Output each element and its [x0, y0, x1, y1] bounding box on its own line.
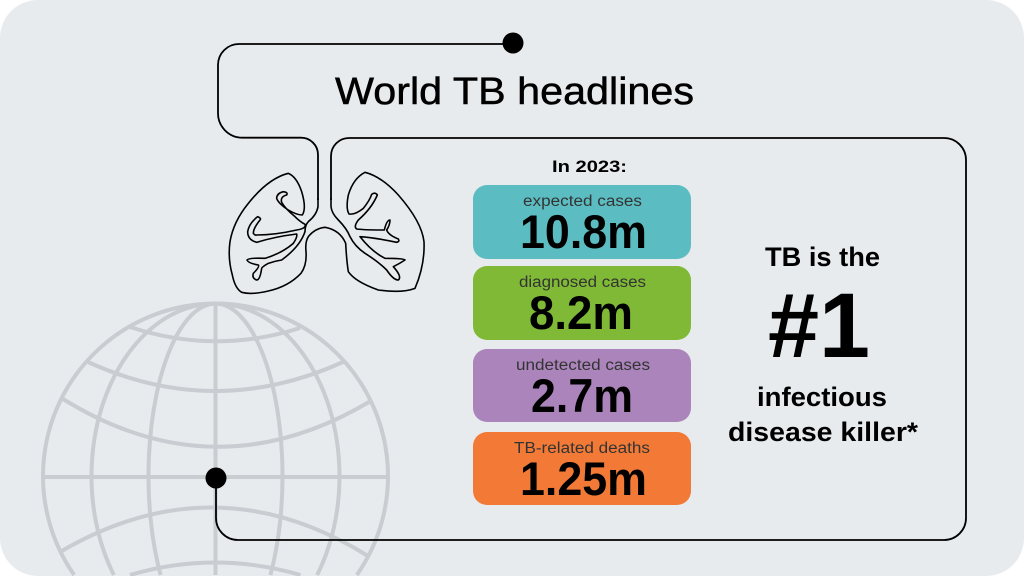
callout: number one killer: TB is the	[765, 242, 880, 272]
stat card: expected cases: 10.8m	[520, 205, 647, 258]
icon: right lung	[325, 172, 424, 291]
dot: globe connector start	[206, 468, 226, 488]
stat card: TB-related deaths	[473, 432, 691, 505]
connector line: title to lungs	[218, 44, 513, 200]
callout: number one killer: disease killer*	[728, 417, 919, 447]
icon: left lung	[229, 173, 325, 293]
callout: number one killer	[728, 242, 919, 447]
icon: globe	[43, 304, 388, 575]
connector line: globe to lungs	[216, 138, 966, 540]
callout: number one killer: infectious	[757, 382, 887, 412]
title: World TB headlines	[335, 71, 694, 113]
stat card: expected cases	[473, 185, 691, 259]
dot: title connector start	[502, 32, 524, 54]
stat card: diagnosed cases: 8.2m	[529, 286, 633, 339]
stat card: undetected cases: 2.7m	[531, 369, 633, 422]
stat card: diagnosed cases	[473, 266, 691, 340]
stat card: diagnosed cases: diagnosed cases	[519, 274, 646, 291]
stat card: TB-related deaths: 1.25m	[520, 452, 647, 505]
stat card: expected cases: expected cases	[523, 193, 642, 210]
stat card: undetected cases: undetected cases	[516, 357, 650, 374]
stat card: undetected cases	[473, 349, 691, 422]
callout: number one killer: #1	[768, 275, 870, 377]
stat card: TB-related deaths: TB-related deaths	[514, 440, 650, 457]
subheading: In 2023: In 2023:	[552, 157, 627, 176]
